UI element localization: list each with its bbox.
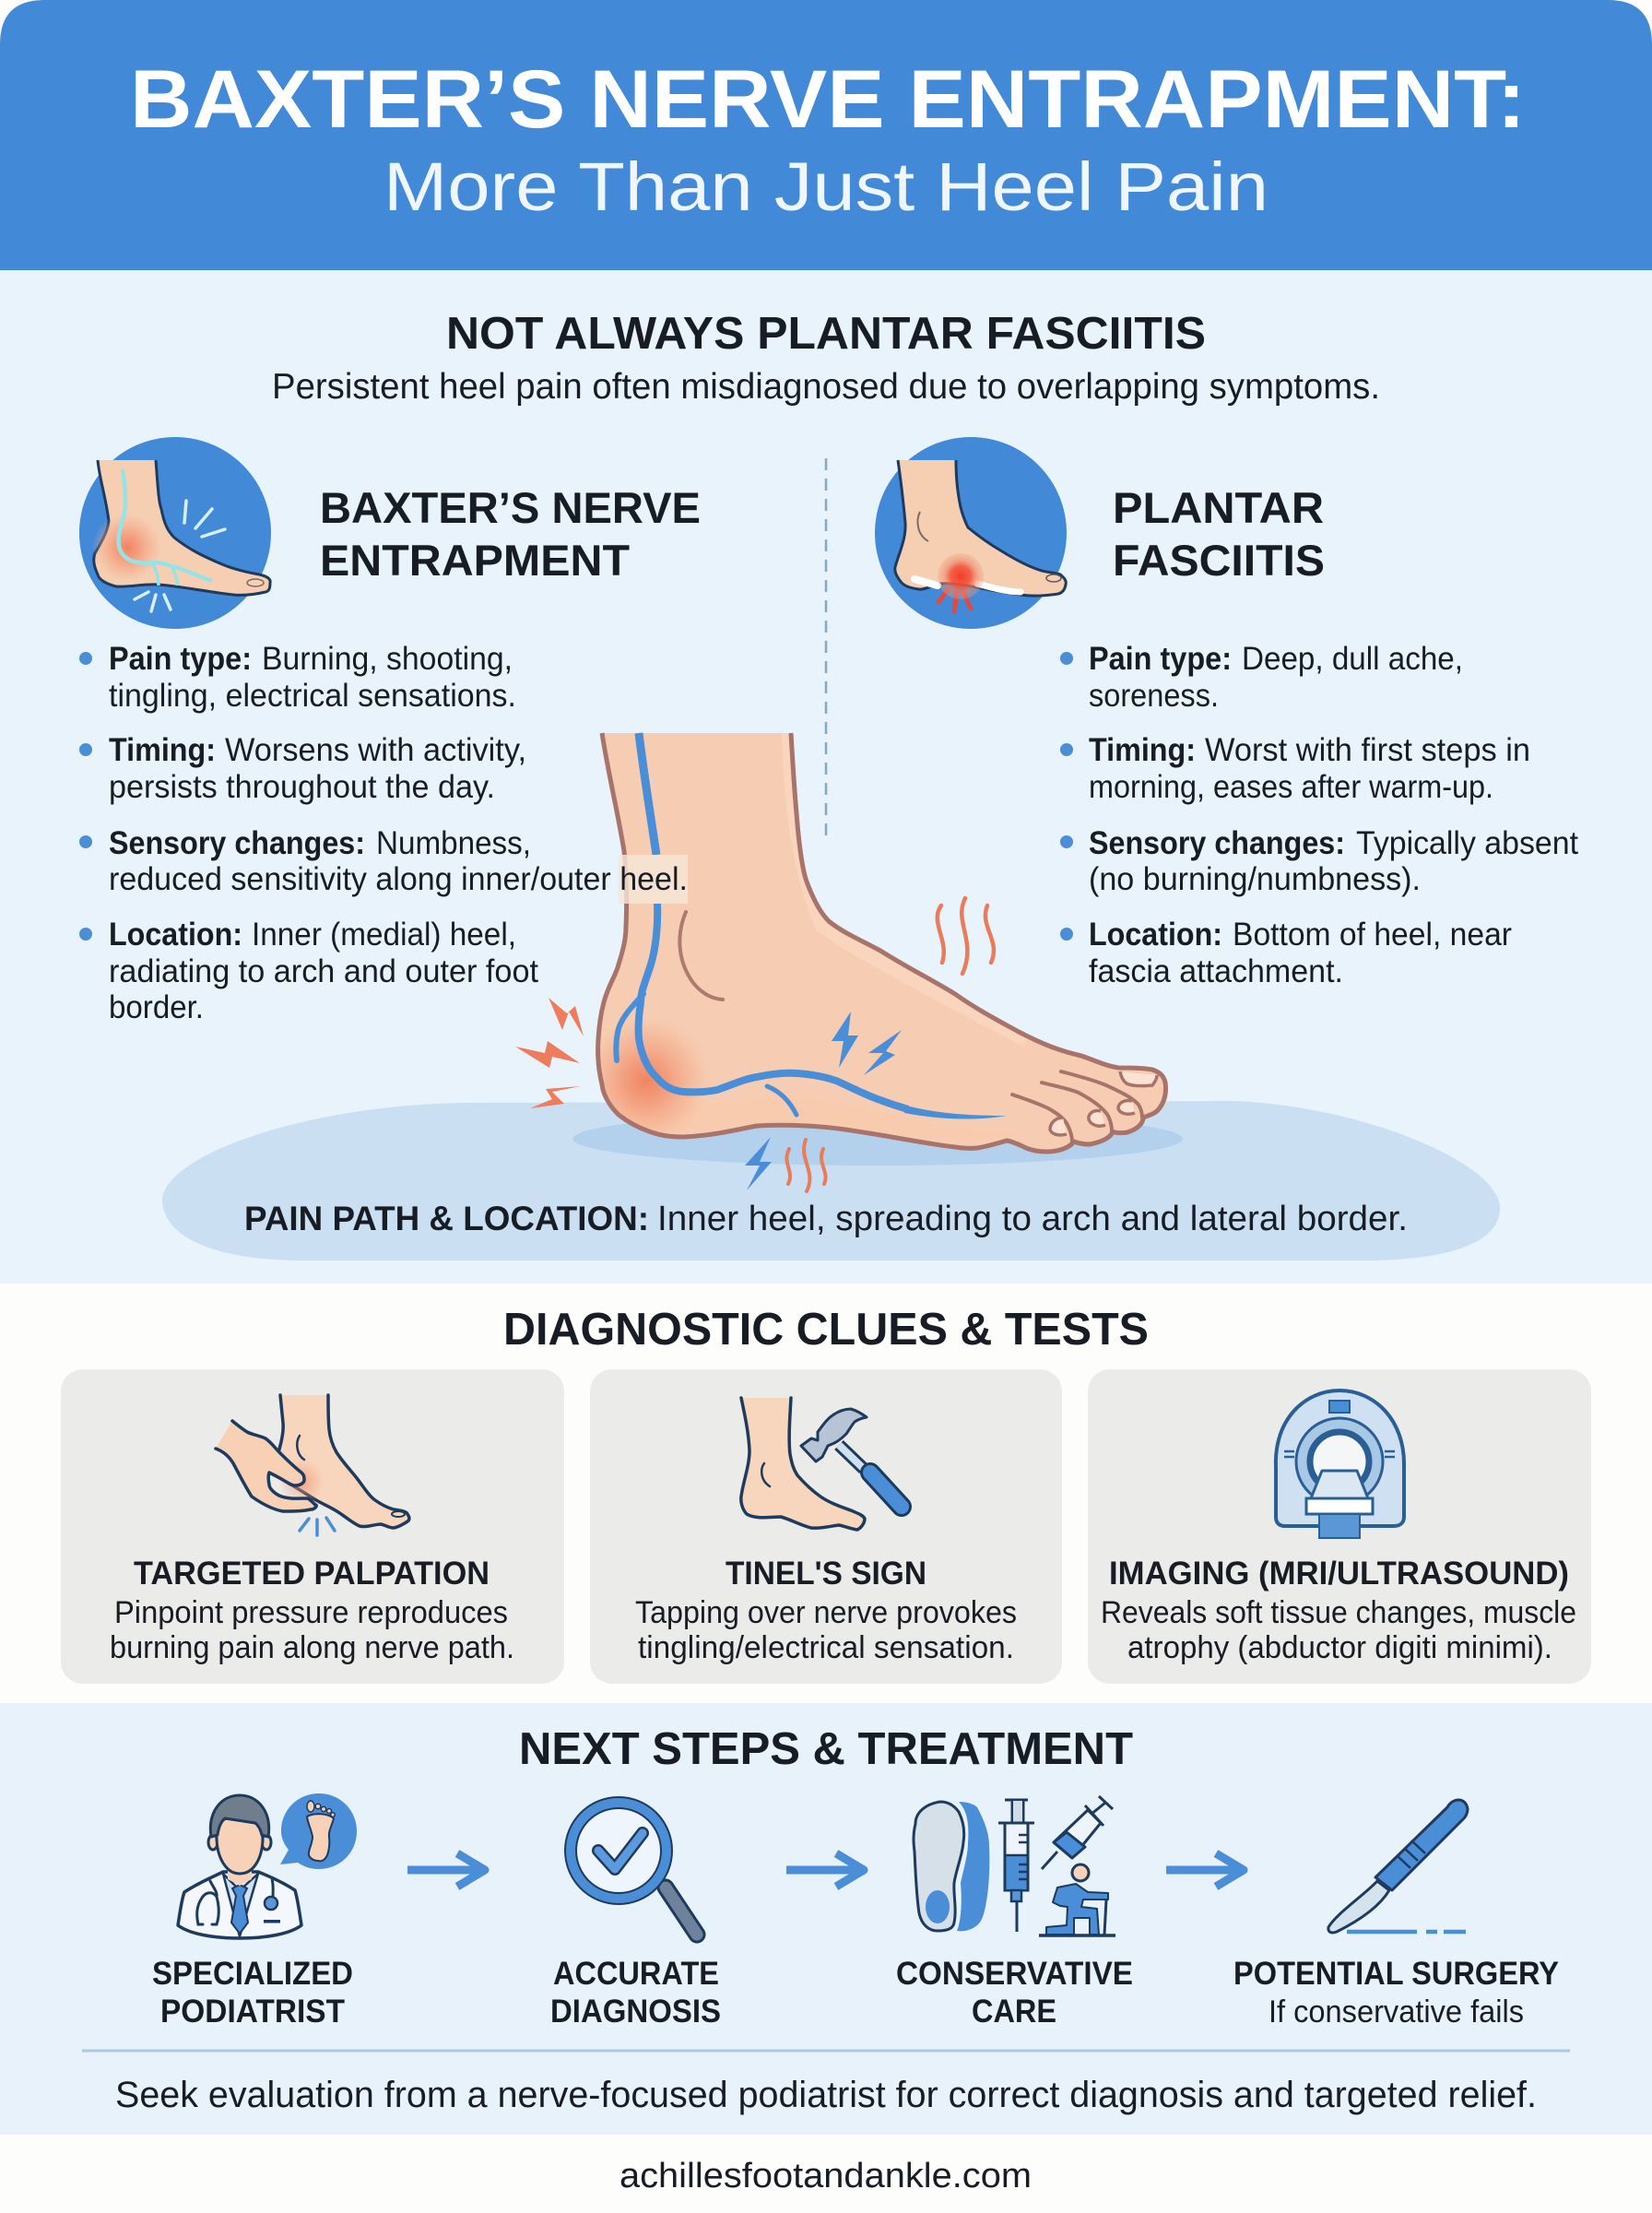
shadow under foot [572,1112,1183,1166]
platform: pain path background [162,1101,1500,1260]
arrow [1166,1853,1244,1887]
closing call to action: Seek evaluation from a nerve-focused podiatrist for correct diagnosis and targeted relief. [115,2075,1537,2115]
arrow [786,1853,864,1887]
step label: PODIATRIST [160,1994,345,2030]
list: Baxter's symptoms: Numbness, [376,825,531,861]
step label [896,1956,1133,2030]
list: Baxter's symptoms: border. [109,989,204,1025]
card title: IMAGING (MRI/ULTRASOUND) [1109,1556,1569,1592]
icon: Baxter's nerve foot [79,437,271,629]
icon: plantar fasciitis foot [875,437,1067,629]
list: Baxter's symptoms: tingling, electrical sensations. [109,678,516,714]
panel: imaging card [1088,1369,1591,1684]
subtitle: More Than Just Heel Pain [384,148,1268,225]
list: Baxter's symptoms [79,641,688,1025]
list: Baxter's symptoms: persists throughout the day. [109,769,495,805]
step label [1233,1956,1559,2030]
list: plantar fasciitis symptoms: Bottom of heel, near [1233,917,1512,953]
step label: POTENTIAL SURGERY [1233,1956,1559,1992]
card description: Reveals soft tissue changes, muscle [1101,1595,1576,1630]
list: plantar fasciitis symptoms: Typically absent [1356,825,1578,861]
heading: Baxter's nerve entrapment: BAXTER’S NERVE [320,483,701,532]
list: plantar fasciitis symptoms: Deep, dull ache, [1242,641,1463,677]
caption: pain path and location: PAIN PATH & LOCATION: [244,1200,649,1237]
step label: CONSERVATIVE [896,1956,1133,1992]
card description [1101,1595,1576,1665]
heading: not always plantar fasciitis: NOT ALWAYS PLANTAR FASCIITIS [446,309,1206,359]
list: plantar fasciitis symptoms: Timing: [1089,732,1196,768]
panel: Tinel's sign card [590,1369,1062,1684]
icon: conservative care [914,1796,1115,1935]
heading: plantar fasciitis: PLANTAR [1113,483,1324,532]
illustration: main foot with nerve path [582,733,1166,1152]
card description: Pinpoint pressure reproduces [114,1595,508,1630]
card description: atrophy (abductor digiti minimi). [1127,1630,1552,1665]
icon: red pain bolts at heel [515,998,584,1108]
list: plantar fasciitis symptoms [1060,641,1578,989]
card description: burning pain along nerve path. [110,1630,514,1665]
icon: MRI scanner [1276,1391,1404,1538]
icon: foot and reflex hammer [741,1398,902,1530]
footer website: achillesfootandankle.com [620,2157,1032,2195]
list: plantar fasciitis symptoms: morning, eases after warm-up. [1089,769,1493,805]
list: plantar fasciitis symptoms: fascia attachment. [1089,953,1343,989]
list: Baxter's symptoms: Sensory changes: [109,825,365,861]
card title: TINEL'S SIGN [726,1556,926,1592]
icon: bolt and waves below arch [745,1137,826,1191]
icon: magnifier with check [571,1803,697,1935]
panel: next steps and treatment [0,1703,1652,2135]
panel: targeted palpation card [61,1369,564,1684]
list: Baxter's symptoms: Inner (medial) heel, [252,917,516,953]
list: Baxter's symptoms: Timing: [109,732,216,768]
heading: Baxter's nerve entrapment [320,483,701,585]
card description: Tapping over nerve provokes [635,1595,1017,1630]
intro text: Persistent heel pain often misdiagnosed due to overlapping symptoms. [272,367,1380,407]
list: plantar fasciitis symptoms: Pain type: [1089,641,1232,677]
title: BAXTER’S NERVE ENTRAPMENT: [130,53,1526,145]
list: Baxter's symptoms: radiating to arch and outer foot [109,953,538,989]
heading: plantar fasciitis: FASCIITIS [1113,536,1325,585]
list: Baxter's symptoms: Pain type: [109,641,252,677]
step label: DIAGNOSIS [550,1994,721,2030]
step label: CARE [972,1994,1056,2030]
panel: main comparison background [0,270,1652,1284]
list: plantar fasciitis symptoms: Location: [1089,917,1222,953]
card title: TARGETED PALPATION [134,1556,490,1592]
card description [110,1595,514,1665]
card description [635,1595,1017,1665]
step label: SPECIALIZED [152,1956,353,1992]
list: Baxter's symptoms: Location: [109,917,242,953]
heading: plantar fasciitis [1113,483,1325,585]
step label [152,1956,353,2030]
soft shading clipped to the foot [582,733,1032,1145]
list: plantar fasciitis symptoms: Sensory changes: [1089,825,1345,861]
list: plantar fasciitis symptoms: (no burning/numbness). [1089,861,1421,897]
panel: header banner [0,0,1652,270]
pale patch behind overlapping text [619,855,688,904]
step label: ACCURATE [553,1956,719,1992]
heading: diagnostic clues and tests: DIAGNOSTIC CLUES & TESTS [503,1305,1149,1355]
step label [550,1956,721,2030]
icon: blue electric bolts on foot [832,1012,902,1075]
list: Baxter's symptoms: reduced sensitivity along inner/outer heel. [109,861,688,897]
card description: tingling/electrical sensation. [638,1630,1014,1665]
list: plantar fasciitis symptoms: soreness. [1089,678,1219,714]
list: Baxter's symptoms: Burning, shooting, [262,641,513,677]
icon: podiatrist with foot bubble [178,1793,357,1938]
icon: hand palpating foot [216,1395,409,1535]
list: Baxter's symptoms: Worsens with activity, [225,732,526,768]
caption: pain path and location: Inner heel, spreading to arch and lateral border. [657,1200,1408,1238]
caption: pain path and location [244,1200,1408,1238]
step label: If conservative fails [1268,1994,1524,2030]
list: plantar fasciitis symptoms: Worst with first steps in [1205,732,1530,768]
icon: heat waves above foot [938,898,994,974]
arrow [407,1853,485,1887]
heading: next steps: NEXT STEPS & TREATMENT [519,1724,1133,1774]
heading: Baxter's nerve entrapment: ENTRAPMENT [320,536,630,585]
icon: scalpel [1328,1800,1468,1933]
